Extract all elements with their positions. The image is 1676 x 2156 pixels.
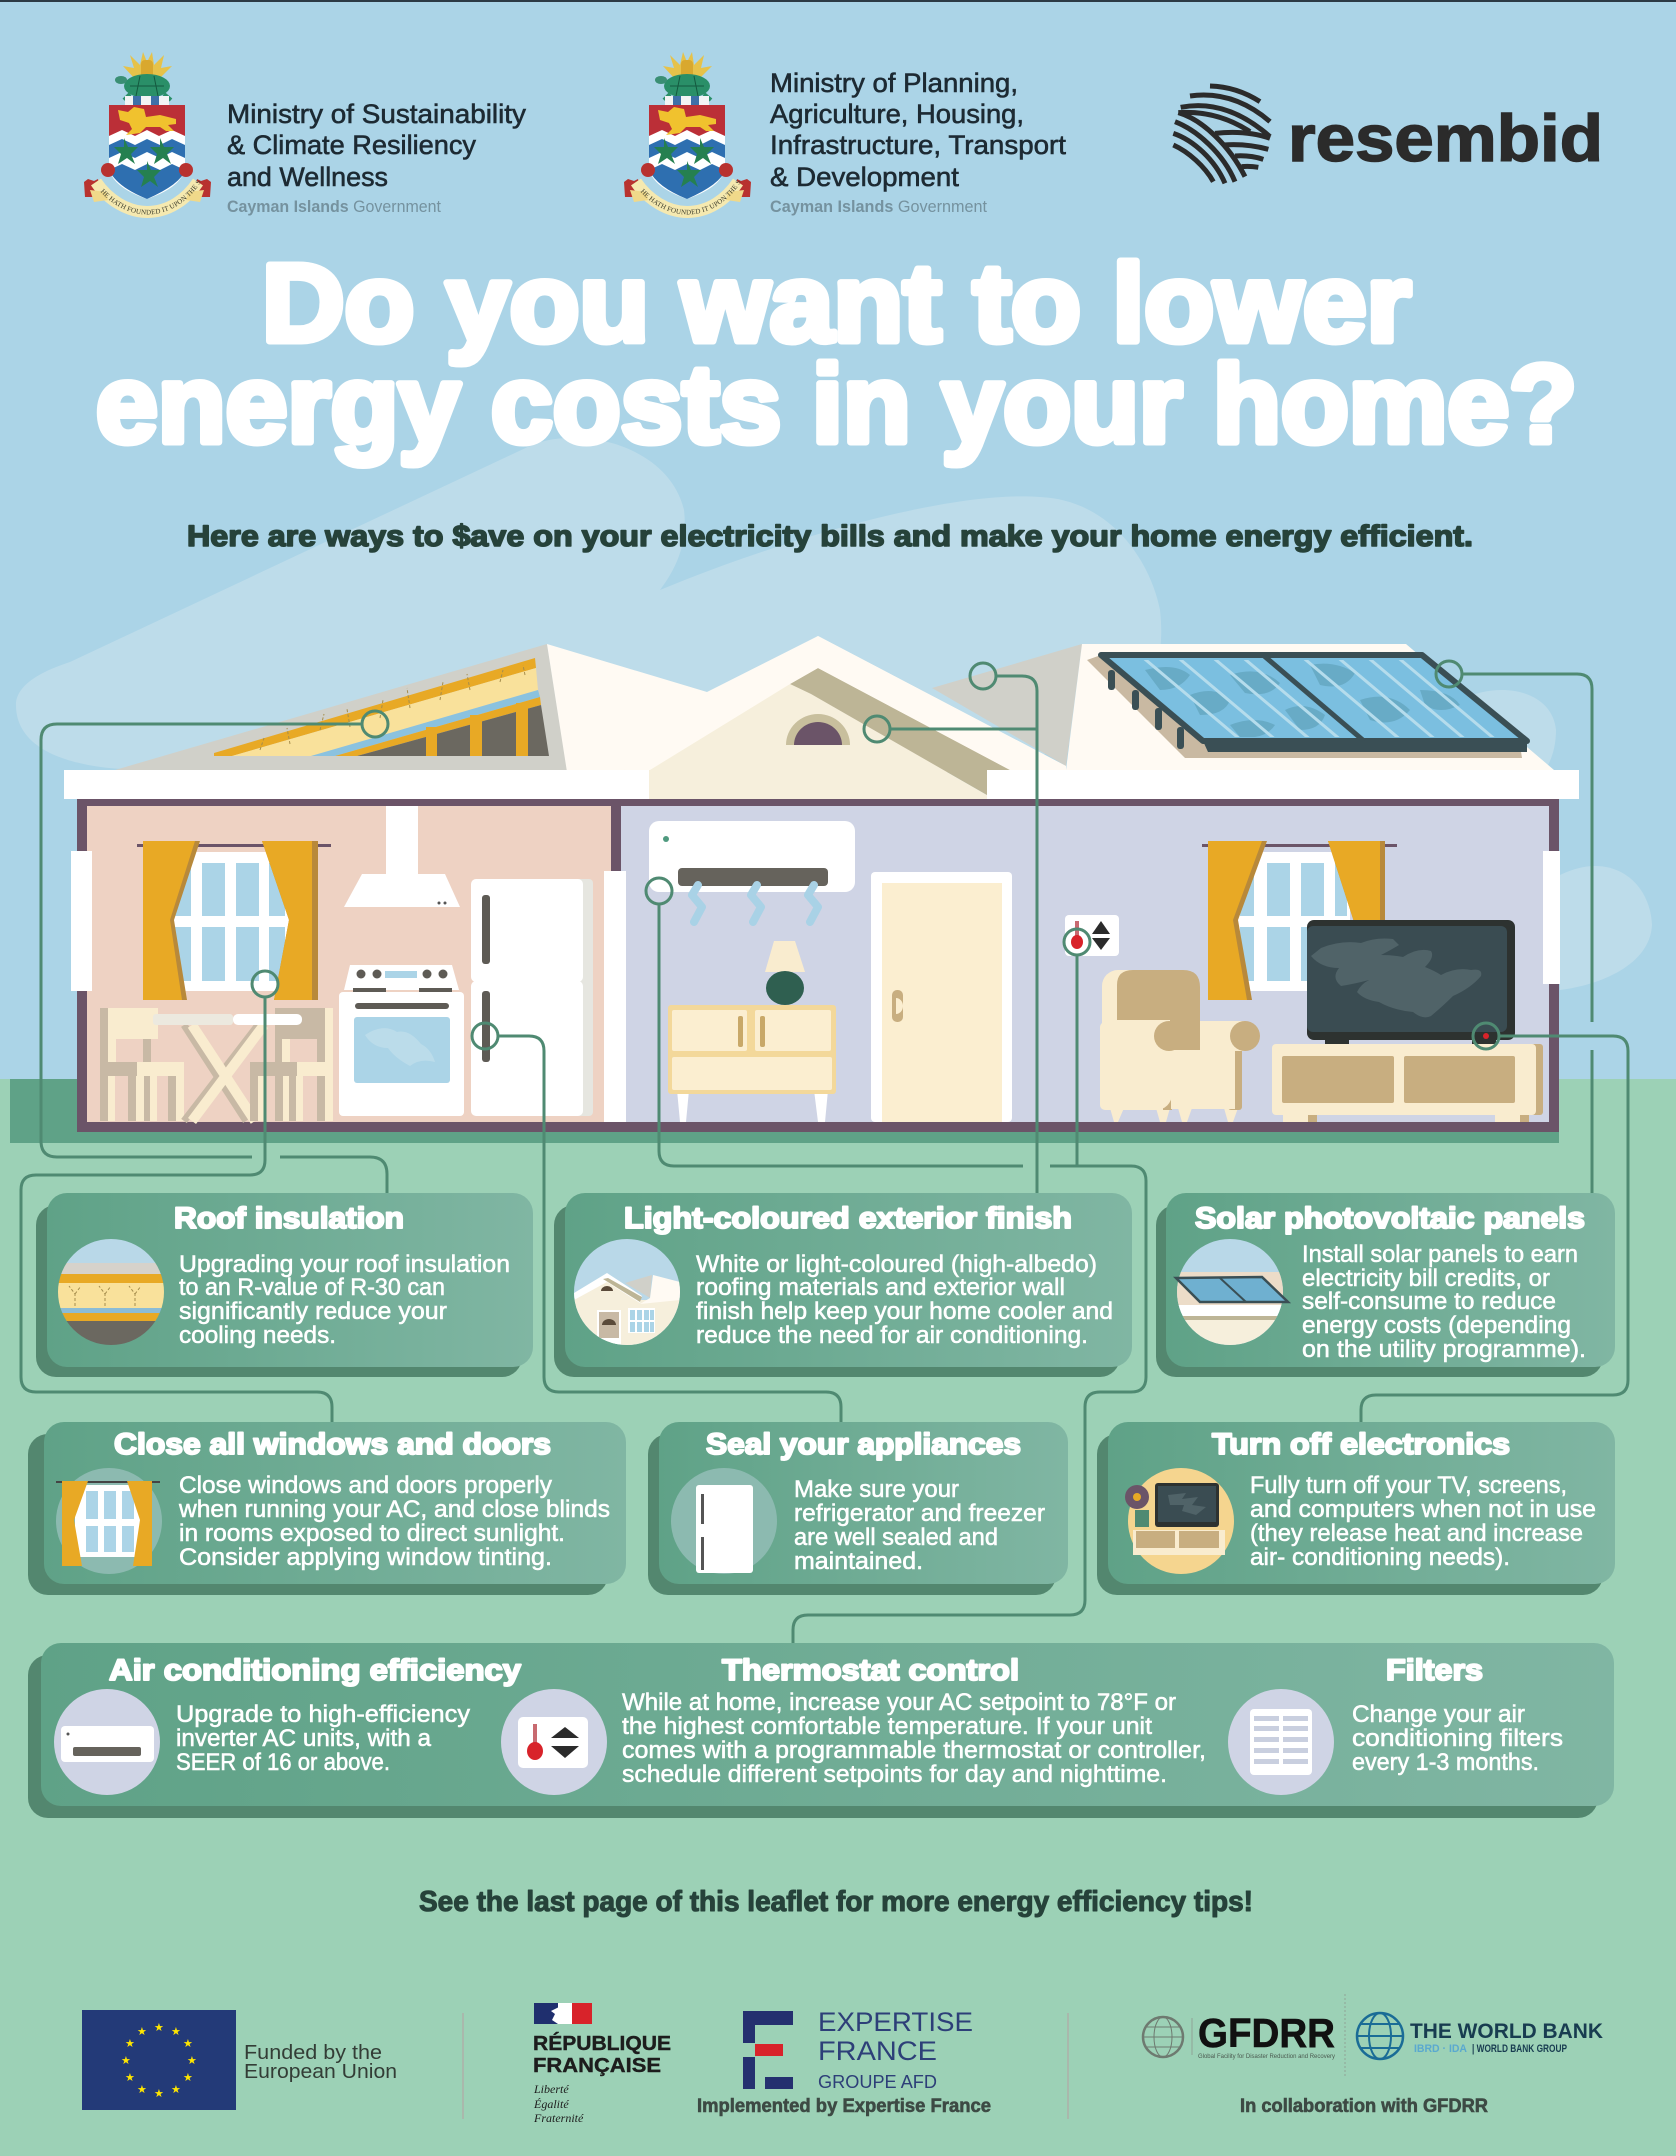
text: air conditioning: inverter AC units, with a — [176, 1725, 432, 1752]
text: Upgrading your roof insulation — [179, 1251, 510, 1278]
text: Make sure your — [794, 1476, 959, 1503]
icon: filter — [1228, 1689, 1334, 1795]
text: electricity bill credits, or — [1302, 1265, 1550, 1292]
text — [794, 1476, 1045, 1575]
text: Ministry of Planning: & Development — [770, 162, 959, 192]
text — [696, 1251, 1113, 1349]
logo: Expertise France — [697, 2007, 991, 2117]
text: Ministry of Sustainability: and Wellness — [227, 162, 388, 192]
range hood — [344, 806, 460, 907]
house walls and rooms — [71, 799, 1560, 1132]
heading: filters: Filters — [1386, 1654, 1483, 1687]
logo: EU flag and funding text: Funded by the — [244, 2042, 382, 2064]
text: White or light-coloured (high-albedo) — [696, 1251, 1097, 1278]
logo: Cayman Islands crest 2 — [624, 52, 751, 218]
background: clouds — [16, 438, 1652, 990]
text — [179, 1251, 510, 1349]
text: filters — [1352, 1701, 1563, 1776]
text: refrigerator and freezer — [794, 1500, 1045, 1527]
icon: house — [574, 1239, 680, 1346]
logo: resembid — [1173, 86, 1603, 183]
logo: République Française — [533, 2003, 671, 2125]
text: air conditioning: Upgrade to high-efficiency — [176, 1701, 470, 1728]
fridge — [471, 879, 593, 1116]
logo: EU flag and funding text: European Union — [244, 2061, 397, 2083]
logo: Expertise France: FRANCE — [818, 2036, 937, 2066]
logo: République Française: Fraternité — [533, 2111, 584, 2125]
text: air- conditioning needs). — [1250, 1544, 1510, 1571]
icon: thermostat — [501, 1689, 607, 1795]
text: Cayman Islands Government 2: Cayman Islands Government — [770, 197, 987, 216]
text: thermostat: the highest comfortable temperature. If your unit — [622, 1713, 1152, 1740]
text: Ministry of Sustainability: & Climate Resiliency — [227, 130, 476, 160]
roof eaves — [64, 770, 1579, 799]
title: energy costs in your home? — [96, 343, 1577, 466]
text: Ministry of Sustainability — [227, 99, 527, 192]
heading: Roof insulation — [174, 1202, 404, 1235]
subtitle: Here are ways to $ave on your electricity bills and make your home energy efficient. — [187, 520, 1473, 553]
connector: exterior finish — [864, 663, 1037, 1193]
text: thermostat: schedule different setpoints for day and nighttime. — [622, 1761, 1167, 1788]
connector: solar — [1436, 661, 1592, 1193]
icon: fridge — [671, 1468, 777, 1574]
connector: appliances — [472, 1023, 841, 1422]
panel: turn off electronics — [1097, 1422, 1615, 1595]
icon: solar panel — [1176, 1239, 1288, 1345]
heading: air conditioning efficiency: Air conditioning efficiency — [109, 1654, 521, 1687]
armchair — [1100, 970, 1260, 1122]
text: filters: every 1-3 months. — [1352, 1749, 1539, 1776]
logo: République Française: Liberté — [533, 2082, 569, 2096]
roof: central gable — [624, 636, 1082, 799]
logo: Expertise France: EXPERTISE — [818, 2007, 973, 2037]
panel: bottom row — [28, 1643, 1614, 1818]
text: Ministry of Planning: Agriculture, Housing, — [770, 99, 1024, 129]
connector lines — [21, 661, 1628, 1643]
text: thermostat: comes with a programmable thermostat or controller, — [622, 1737, 1206, 1764]
text: air conditioning: SEER of 16 or above. — [176, 1749, 390, 1776]
logo: EU flag and funding text — [82, 2010, 397, 2110]
background: ground — [0, 1079, 1676, 2156]
logo: EU flag and funding text: ★★★★★★★★★★★★ — [121, 2021, 197, 2100]
thermostat — [1065, 915, 1119, 956]
title — [96, 242, 1577, 466]
text: self-consume to reduce — [1302, 1288, 1556, 1315]
logo: GFDRR and World Bank: In collaboration with GFDRR — [1240, 2096, 1488, 2117]
text: when running your AC, and close blinds — [178, 1496, 610, 1523]
text: Fully turn off your TV, screens, — [1250, 1472, 1567, 1499]
text: Close windows and doors properly — [179, 1472, 552, 1499]
heading: Light-coloured exterior finish — [624, 1202, 1072, 1235]
text: to an R-value of R-30 can — [179, 1274, 445, 1301]
text: significantly reduce your — [179, 1298, 447, 1325]
background: sky — [0, 0, 1676, 1085]
icon: television — [1125, 1468, 1234, 1574]
connector: thermostat and air conditioner — [646, 878, 1146, 1643]
logo: Cayman Islands crest 1 — [84, 52, 211, 218]
door — [871, 872, 1012, 1122]
connector: electronics — [1361, 1023, 1628, 1422]
connector: windows and doors — [21, 971, 332, 1422]
text: energy costs (depending — [1302, 1312, 1571, 1339]
logo: Expertise France: Implemented by Expertise France — [697, 2096, 991, 2117]
text — [1302, 1241, 1586, 1363]
text: on the utility programme). — [1302, 1336, 1586, 1363]
logo: GFDRR and World Bank: THE WORLD BANK — [1410, 2020, 1603, 2043]
living room window with curtains — [1202, 841, 1397, 1000]
cabinet with lamp — [668, 941, 836, 1122]
heading: Solar photovoltaic panels — [1195, 1202, 1585, 1235]
heading: Seal your appliances — [706, 1428, 1021, 1461]
text: reduce the need for air conditioning. — [696, 1322, 1088, 1349]
icon: roof layers — [58, 1239, 164, 1345]
text: roofing materials and exterior wall — [696, 1274, 1065, 1301]
kitchen window with curtains — [137, 841, 331, 1000]
heading: Turn off electronics — [1212, 1428, 1510, 1461]
text: filters: conditioning filters — [1352, 1725, 1563, 1752]
icon: window — [56, 1468, 162, 1574]
text: Ministry of Planning: Infrastructure, Transport — [770, 130, 1067, 160]
text: cooling needs. — [179, 1322, 336, 1349]
heading: Close all windows and doors — [114, 1428, 551, 1461]
panel: seal your appliances — [648, 1422, 1068, 1595]
text: air conditioning — [176, 1701, 470, 1776]
logo: Cayman Islands crest 1: HE HATH FOUNDED IT UPON THE SEAS — [100, 180, 200, 214]
heading: thermostat control: Thermostat control — [722, 1654, 1019, 1687]
logo: République Française: RÉPUBLIQUE — [533, 2032, 671, 2055]
roof: right with solar panels — [1066, 644, 1554, 770]
air conditioner — [649, 821, 855, 922]
text: Ministry of Planning: Ministry of Planning, — [770, 68, 1018, 98]
text: filters: Change your air — [1352, 1701, 1525, 1728]
logo: Cayman Islands crest 2: HE HATH FOUNDED IT UPON THE SEAS — [640, 180, 740, 214]
text: (they release heat and increase — [1250, 1520, 1583, 1547]
text: Consider applying window tinting. — [179, 1544, 552, 1571]
panel: light-coloured exterior finish — [554, 1193, 1132, 1377]
text — [178, 1472, 610, 1571]
text: Install solar panels to earn — [1302, 1241, 1578, 1268]
text: and computers when not in use — [1250, 1496, 1596, 1523]
footer note: See the last page of this leaflet for more energy efficiency tips! — [419, 1886, 1253, 1918]
roof: left insulated roof — [115, 636, 1066, 772]
panel: roof insulation — [36, 1193, 533, 1377]
panel: close all windows and doors — [28, 1422, 626, 1595]
logo: GFDRR and World Bank — [1143, 1994, 1603, 2117]
stove — [339, 965, 464, 1116]
text: are well sealed and — [794, 1524, 998, 1551]
house illustration — [64, 636, 1579, 1132]
text: Cayman Islands Government 1: Cayman Islands Government — [227, 197, 441, 216]
icon: air conditioner — [54, 1689, 160, 1795]
television and stand — [1272, 920, 1543, 1122]
logo: GFDRR and World Bank: GFDRR — [1198, 2010, 1335, 2056]
logo: GFDRR and World Bank: Global Facility for Disaster Reduction and Recovery — [1198, 2054, 1335, 2060]
logo: République Française: Égalité — [533, 2097, 569, 2111]
text: finish help keep your home cooler and — [696, 1298, 1113, 1325]
text: Ministry of Planning — [770, 68, 1067, 192]
logo: République Française: FRANÇAISE — [533, 2055, 661, 2077]
text: thermostat: While at home, increase your AC setpoint to 78°F or — [622, 1689, 1176, 1716]
text: thermostat — [622, 1689, 1206, 1788]
logo: GFDRR and World Bank: IBRD · IDA — [1414, 2043, 1467, 2055]
dining table and chairs — [100, 1008, 333, 1121]
text — [1250, 1472, 1596, 1571]
text: in rooms exposed to direct sunlight. — [179, 1520, 565, 1547]
title: Do you want to lower — [262, 242, 1411, 365]
text: Ministry of Sustainability: Ministry of Sustainability — [227, 99, 527, 129]
logo: Expertise France: GROUPE AFD — [818, 2072, 937, 2092]
logo: resembid: resembid — [1288, 101, 1603, 175]
text: maintained. — [794, 1548, 923, 1575]
logo: GFDRR and World Bank: | WORLD BANK GROUP — [1472, 2043, 1567, 2055]
connector: roof insulation — [41, 711, 388, 1193]
panel: solar photovoltaic panels — [1156, 1193, 1615, 1377]
